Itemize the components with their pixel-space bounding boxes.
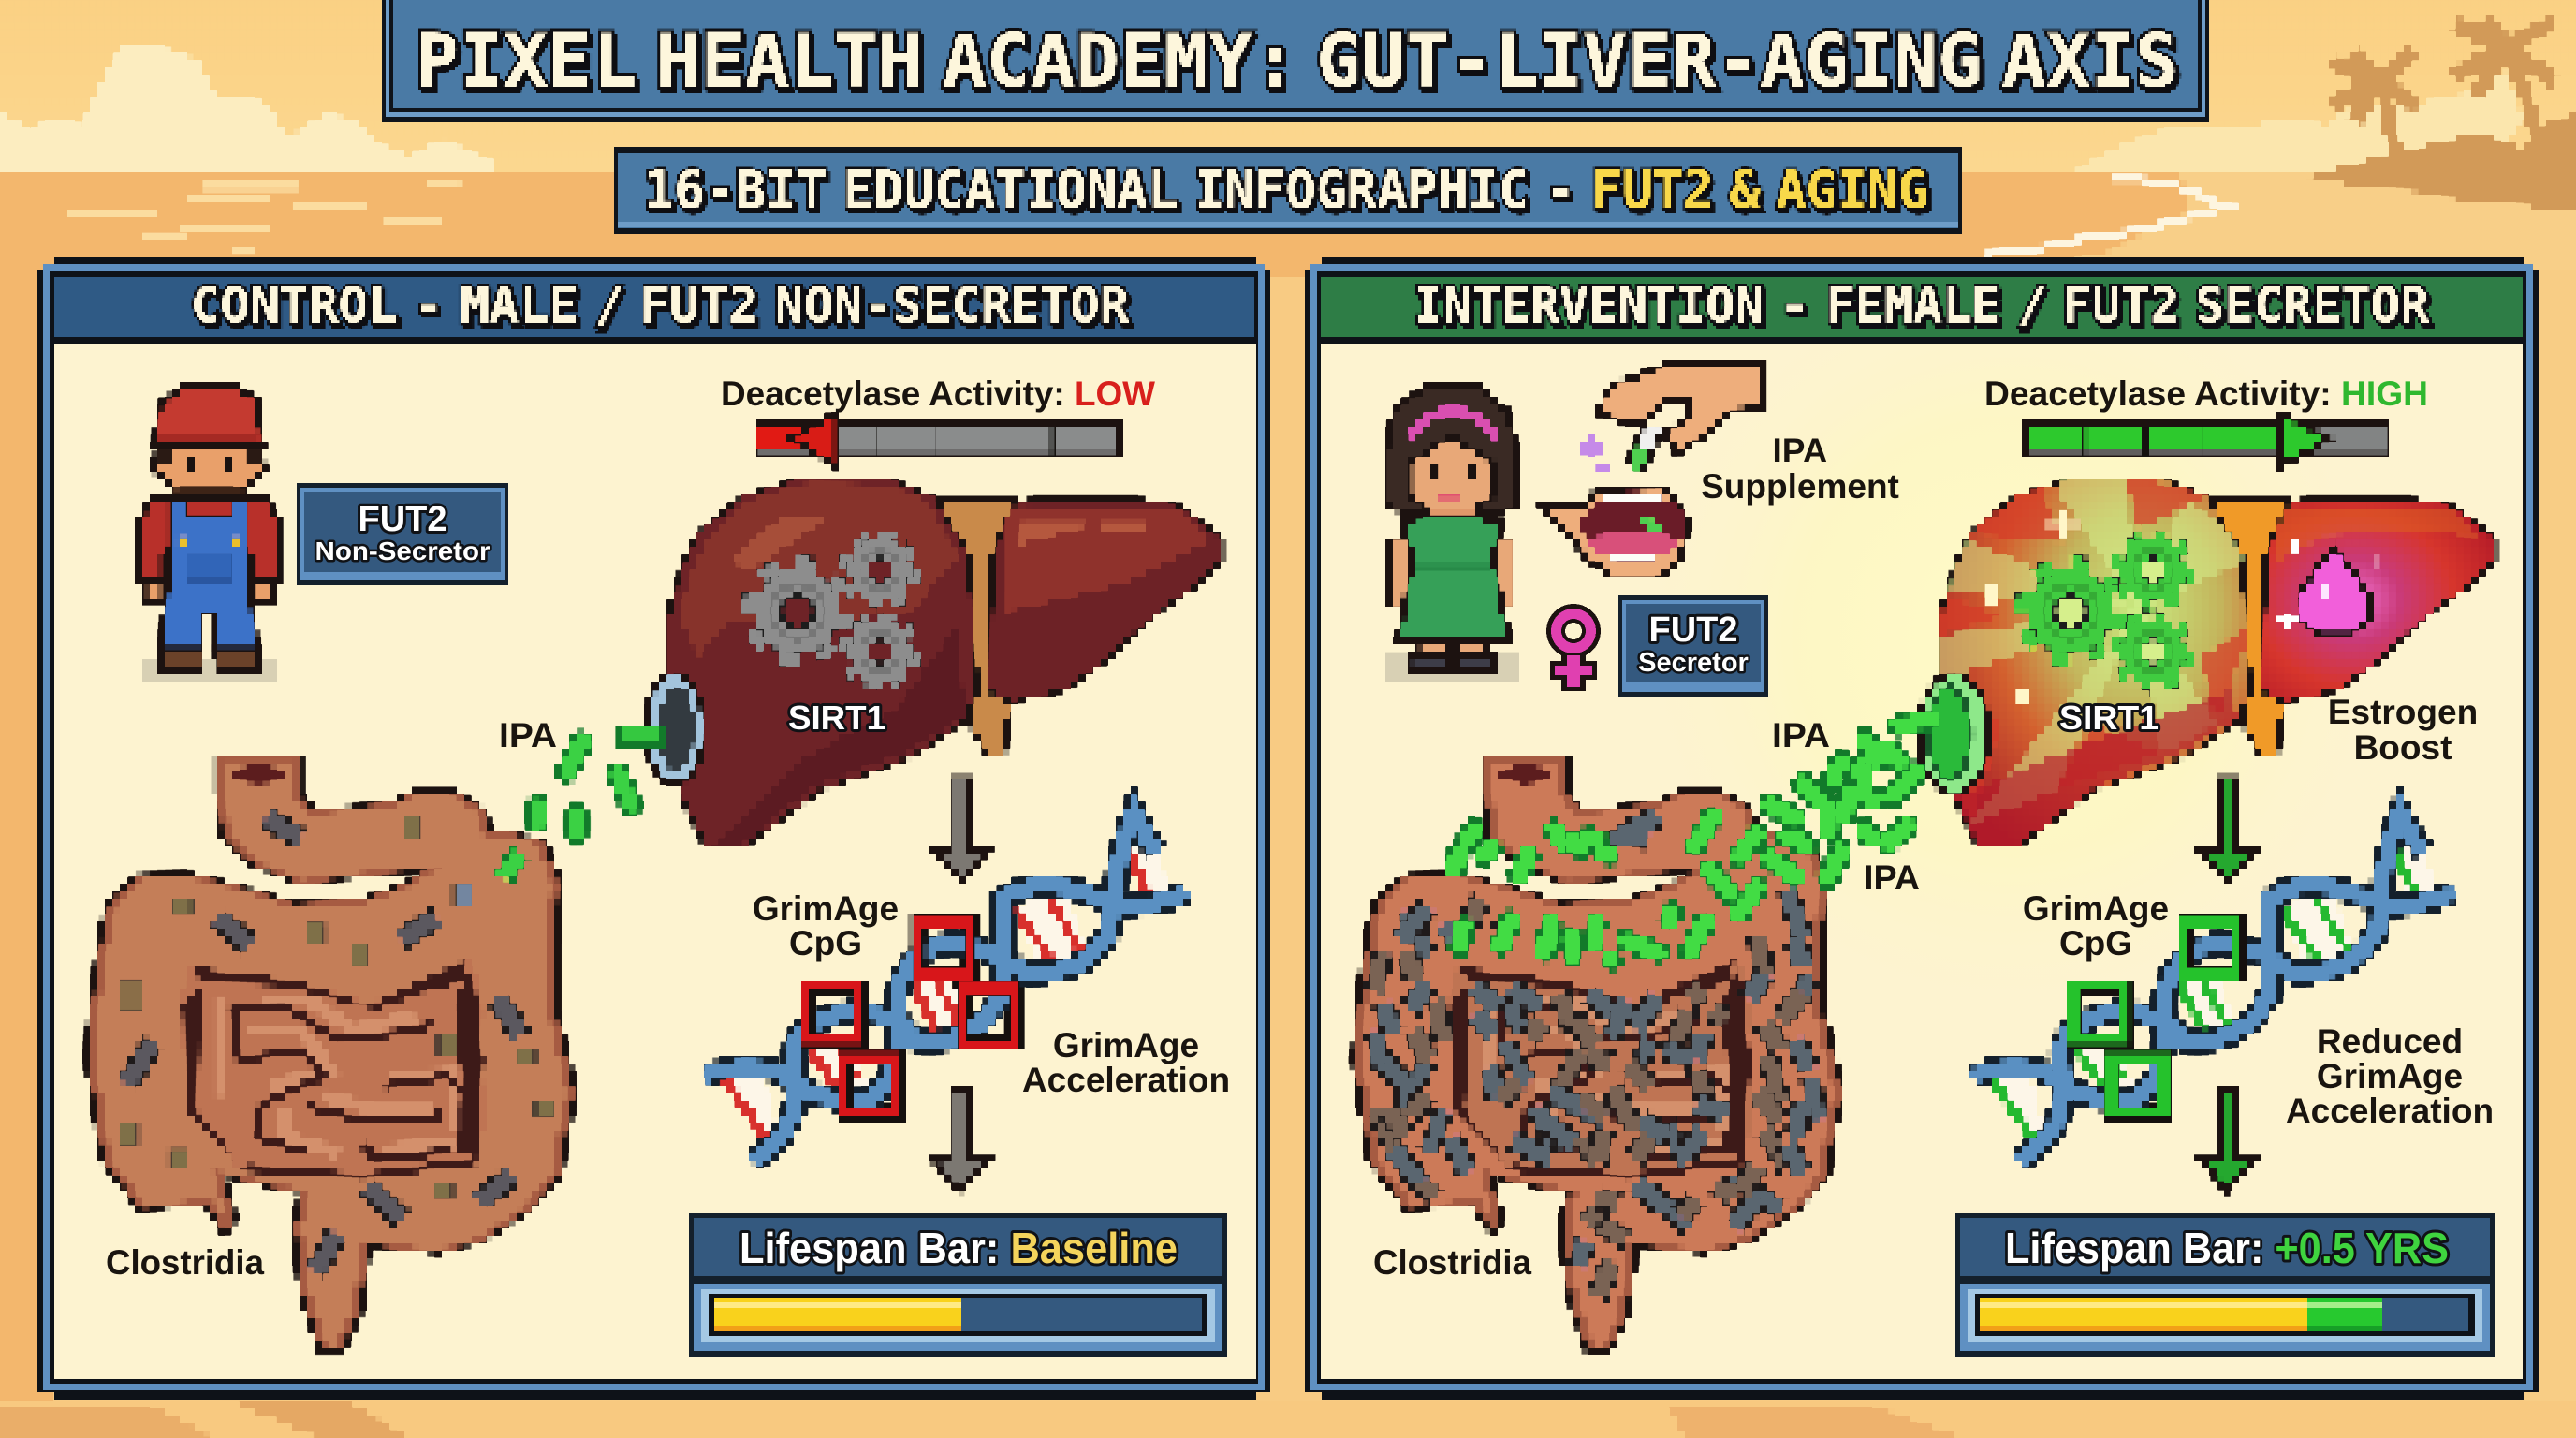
label: IPA lower: IPA [1864,858,1920,897]
lifespan bar: baseline: Lifespan Bar: Baseline [739,1224,1178,1272]
liver: intervention [1933,473,2495,847]
title banner: PIXEL HEALTH ACADEMY: GUT-LIVER-AGING AXIS [415,20,2179,104]
IPA particles: intervention [1454,719,1931,960]
estrogen drop [2276,539,2377,635]
label: deacetylase activity low: Deacetylase Activity: LOW [721,374,1155,413]
FUT2 badge: secretor [1618,595,1768,697]
icon: male character [140,387,278,680]
arrow: liver to DNA (green) [2201,779,2254,879]
FUT2 badge: secretor: FUT2 [1649,610,1737,650]
label: Clostridia right: Clostridia [1373,1243,1531,1282]
IPA receptor: active [1919,673,1989,794]
lifespan bar: +0.5 years: Lifespan Bar: +0.5 YRS [2005,1224,2449,1272]
portal vein receptor [620,673,704,784]
icon: female character [1386,387,1516,680]
subtitle banner: 16-BIT EDUCATIONAL INFOGRAPHIC - FUT2 & AGING [644,160,1928,221]
panel frame: control [37,257,1270,1400]
markers: CpG sites protected [2073,922,2237,1113]
DNA: intervention [1972,813,2454,1160]
label: Clostridia: Clostridia [106,1243,264,1282]
control illustrations [87,387,1222,1351]
DNA: control [706,813,1187,1160]
panel: intervention [1305,257,2539,1400]
subtitle banner [614,147,1962,234]
icon: open mouth [1544,488,1689,577]
panel: control [37,257,1270,1400]
label: Estrogen Boost: Boost [2354,728,2452,767]
shoreline [1983,180,2227,256]
gears: SIRT1 active [2023,535,2188,687]
title banner [382,0,2209,122]
arrow: DNA to lifespan (green) [2201,1091,2254,1190]
label: IPA Supplement: IPA [1773,432,1827,470]
label: IPA: IPA [499,716,557,755]
palm trees [2338,24,2548,154]
liver: control [667,477,1222,847]
arrow: DNA to lifespan [933,1091,987,1190]
light rays and red wedges [1933,473,2254,824]
intervention illustrations [1354,366,2495,1351]
cloud [0,44,493,171]
FUT2 badge: secretor: Secretor [1638,648,1749,678]
label: Estrogen Boost: Estrogen [2328,693,2478,731]
label: SIRT1 active: SIRT1 [2059,698,2159,737]
lifespan bar: baseline [689,1213,1227,1357]
gears: SIRT1 inactive [750,536,915,686]
panel heading: intervention: INTERVENTION - FEMALE / FUT2 SECRETOR [1413,278,2430,334]
label: Reduced GrimAge Acceleration: GrimAge [2317,1057,2463,1095]
label: SIRT1: SIRT1 [788,698,886,737]
arrow: liver to DNA [933,779,987,879]
intestine: control [87,757,576,1351]
label: GrimAge CpG: CpG [789,924,862,962]
bacteria: Clostridia (sparse) [126,817,520,1272]
FUT2 badge: non-secretor: FUT2 [358,500,447,539]
label: GrimAge CpG right: CpG [2059,924,2132,962]
island [2308,112,2576,209]
label: deacetylase activity high: Deacetylase Activity: HIGH [1984,374,2428,413]
label: Reduced GrimAge Acceleration: Acceleration [2286,1092,2494,1130]
label: Reduced GrimAge Acceleration: Reduced [2317,1022,2463,1061]
label: IPA upper: IPA [1772,716,1830,755]
lifespan bar: +0.5 years [1955,1213,2495,1357]
panel heading: control: CONTROL - MALE / FUT2 NON-SECRETOR [191,278,1130,334]
panel frame: intervention [1305,257,2539,1400]
label: IPA Supplement: Supplement [1701,467,1899,506]
activity gauge: high [2025,413,2388,466]
icon: female symbol [1546,604,1601,691]
markers: GrimAge CpG sites [807,922,1015,1113]
label: GrimAge CpG right: GrimAge [2023,889,2169,928]
intestine: intervention [1354,757,1843,1351]
label: GrimAge Acceleration: Acceleration [1022,1061,1230,1099]
dune [2076,72,2523,171]
FUT2 badge: non-secretor: Non-Secretor [315,536,490,565]
icon: hand with supplement [1581,366,1761,471]
IPA particles: control [537,741,631,832]
label: GrimAge CpG: GrimAge [753,889,899,928]
label: GrimAge Acceleration: GrimAge [1053,1026,1199,1064]
FUT2 badge: non-secretor [297,483,508,585]
bacteria: Clostridia (dense) [1375,815,1818,1298]
glow around liver [1657,344,2523,1055]
activity gauge: low [757,413,1120,466]
